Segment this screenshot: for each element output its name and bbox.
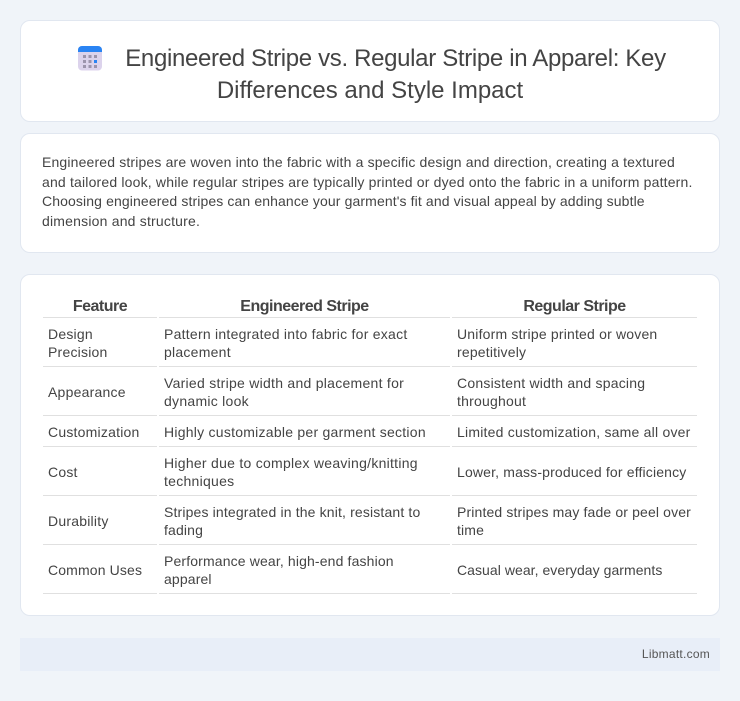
comparison table: Uniform stripe printed or woven	[457, 326, 657, 342]
comparison table: Engineered Stripe	[240, 298, 369, 315]
comparison table: Feature	[73, 298, 127, 315]
comparison table: Appearance	[48, 384, 126, 400]
title: Engineered Stripe vs. Regular Stripe in Apparel: Key	[125, 45, 666, 72]
comparison table: dynamic look	[164, 393, 249, 409]
comparison table: Varied stripe width and placement for	[164, 375, 404, 391]
comparison table: Limited customization, same all over	[457, 424, 691, 440]
comparison table: Highly customizable per garment section	[164, 424, 426, 440]
comparison table: apparel	[164, 571, 212, 587]
comparison table: time	[457, 522, 484, 538]
icon: calendar	[78, 46, 102, 70]
comparison table: Pattern integrated into fabric for exact	[164, 326, 407, 342]
comparison table: Casual wear, everyday garments	[457, 562, 662, 578]
comparison table: Precision	[48, 344, 108, 360]
footer credit: Libmatt.com	[642, 647, 710, 661]
intro text	[42, 154, 693, 228]
comparison table: repetitively	[457, 344, 526, 360]
comparison table: Durability	[48, 513, 109, 529]
comparison table: techniques	[164, 473, 234, 489]
comparison table	[43, 298, 697, 594]
comparison table: Regular Stripe	[523, 298, 626, 315]
comparison table: Customization	[48, 424, 140, 440]
panel: header card	[20, 20, 720, 122]
intro text: Choosing engineered stripes can enhance your garment's fit and visual appeal by adding subtle	[42, 193, 645, 209]
comparison table: Lower, mass-produced for efficiency	[457, 464, 686, 480]
intro text: dimension and structure.	[42, 212, 200, 228]
comparison table: fading	[164, 522, 203, 538]
comparison table: placement	[164, 344, 231, 360]
comparison table: Stripes integrated in the knit, resistant to	[164, 504, 420, 520]
title: Differences and Style Impact	[217, 77, 523, 104]
comparison table: Cost	[48, 464, 78, 480]
panel: comparison table card	[20, 274, 720, 616]
intro text: and tailored look, while regular stripes are typically printed or dyed onto the fabric in a uniform pattern.	[42, 174, 693, 190]
title	[125, 45, 666, 104]
comparison table: Performance wear, high-end fashion	[164, 553, 394, 569]
comparison table: Printed stripes may fade or peel over	[457, 504, 691, 520]
intro text: Engineered stripes are woven into the fabric with a specific design and direction, creating a textured	[42, 154, 675, 170]
comparison table: throughout	[457, 393, 526, 409]
comparison table: Design	[48, 326, 93, 342]
panel: intro card	[20, 133, 720, 253]
footer bar	[20, 638, 720, 671]
comparison table: Consistent width and spacing	[457, 375, 645, 391]
comparison table: Higher due to complex weaving/knitting	[164, 455, 418, 471]
comparison table: Common Uses	[48, 562, 142, 578]
